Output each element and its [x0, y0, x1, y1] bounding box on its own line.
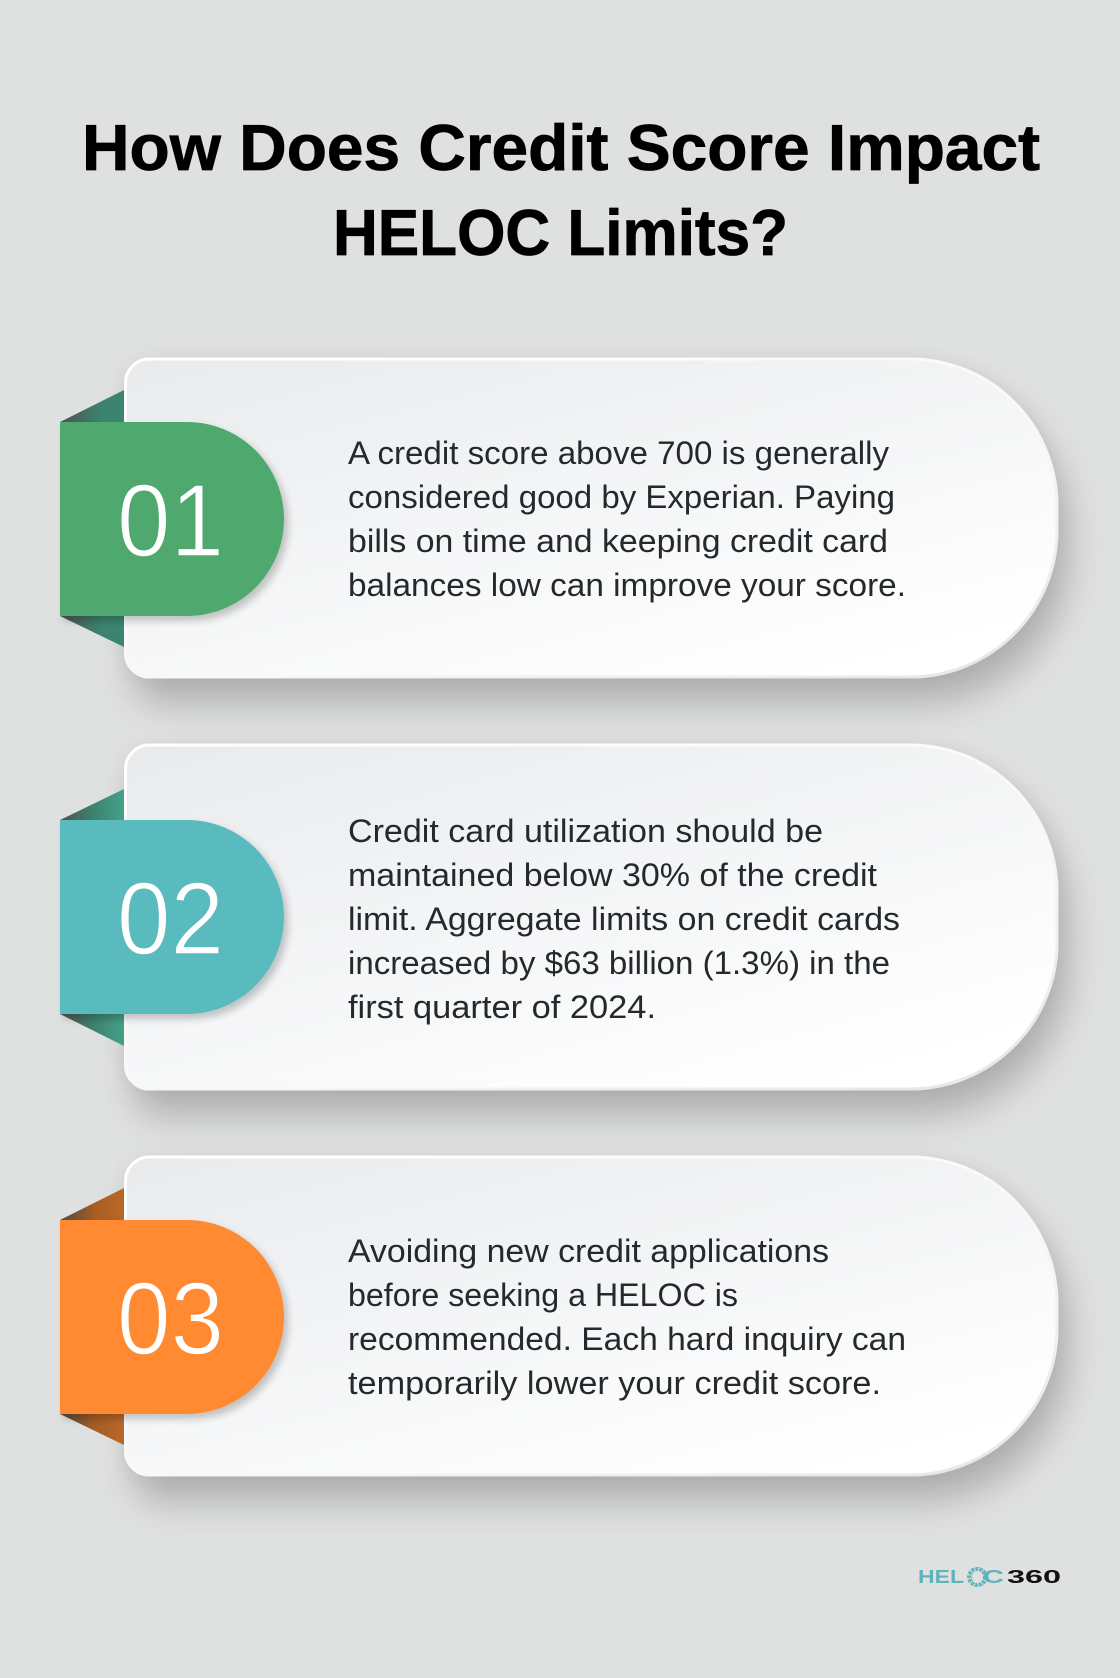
logo: HELOC360: HEL	[918, 1567, 964, 1587]
badge 01	[60, 422, 284, 616]
ribbon folds 02	[60, 789, 124, 1046]
text 02: first quarter of 2024.	[348, 989, 656, 1025]
text 02	[348, 813, 900, 1025]
badge 02	[60, 820, 284, 1014]
card 03	[126, 1157, 1057, 1475]
text 03	[348, 1233, 906, 1401]
logo: HELOC360: O	[968, 1562, 988, 1592]
text 03: recommended. Each hard inquiry can	[348, 1321, 906, 1357]
ribbon folds 01	[60, 390, 124, 647]
title: HELOC Limits?	[333, 196, 788, 269]
ribbon folds 03	[60, 1188, 124, 1445]
logo: HELOC360: C	[983, 1567, 1004, 1587]
logo: HELOC360	[918, 1562, 1061, 1592]
title: How Does Credit Score Impact	[82, 111, 1040, 184]
text 03: before seeking a HELOC is	[348, 1277, 738, 1313]
number 03: 03	[117, 1261, 224, 1376]
number 02: 02	[117, 861, 224, 976]
number 01: 01	[117, 463, 224, 578]
panel: step 02	[60, 745, 1057, 1089]
title	[82, 111, 1040, 269]
text 03: temporarily lower your credit score.	[348, 1365, 881, 1401]
panel: step 01	[60, 359, 1057, 677]
panel: step 03	[60, 1157, 1057, 1475]
text 01	[348, 435, 906, 603]
text 02: increased by $63 billion (1.3%) in the	[348, 945, 890, 981]
card 01	[126, 359, 1057, 677]
text 02: maintained below 30% of the credit	[348, 857, 877, 893]
text 01: balances low can improve your score.	[348, 567, 906, 603]
card 02	[126, 745, 1057, 1089]
logo: HELOC360: 360	[1007, 1567, 1061, 1587]
text 01: bills on time and keeping credit card	[348, 523, 888, 559]
badge 03	[60, 1220, 284, 1414]
text 01: A credit score above 700 is generally	[348, 435, 889, 471]
text 03: Avoiding new credit applications	[348, 1233, 829, 1269]
text 02: Credit card utilization should be	[348, 813, 823, 849]
text 01: considered good by Experian. Paying	[348, 479, 895, 515]
text 02: limit. Aggregate limits on credit cards	[348, 901, 900, 937]
